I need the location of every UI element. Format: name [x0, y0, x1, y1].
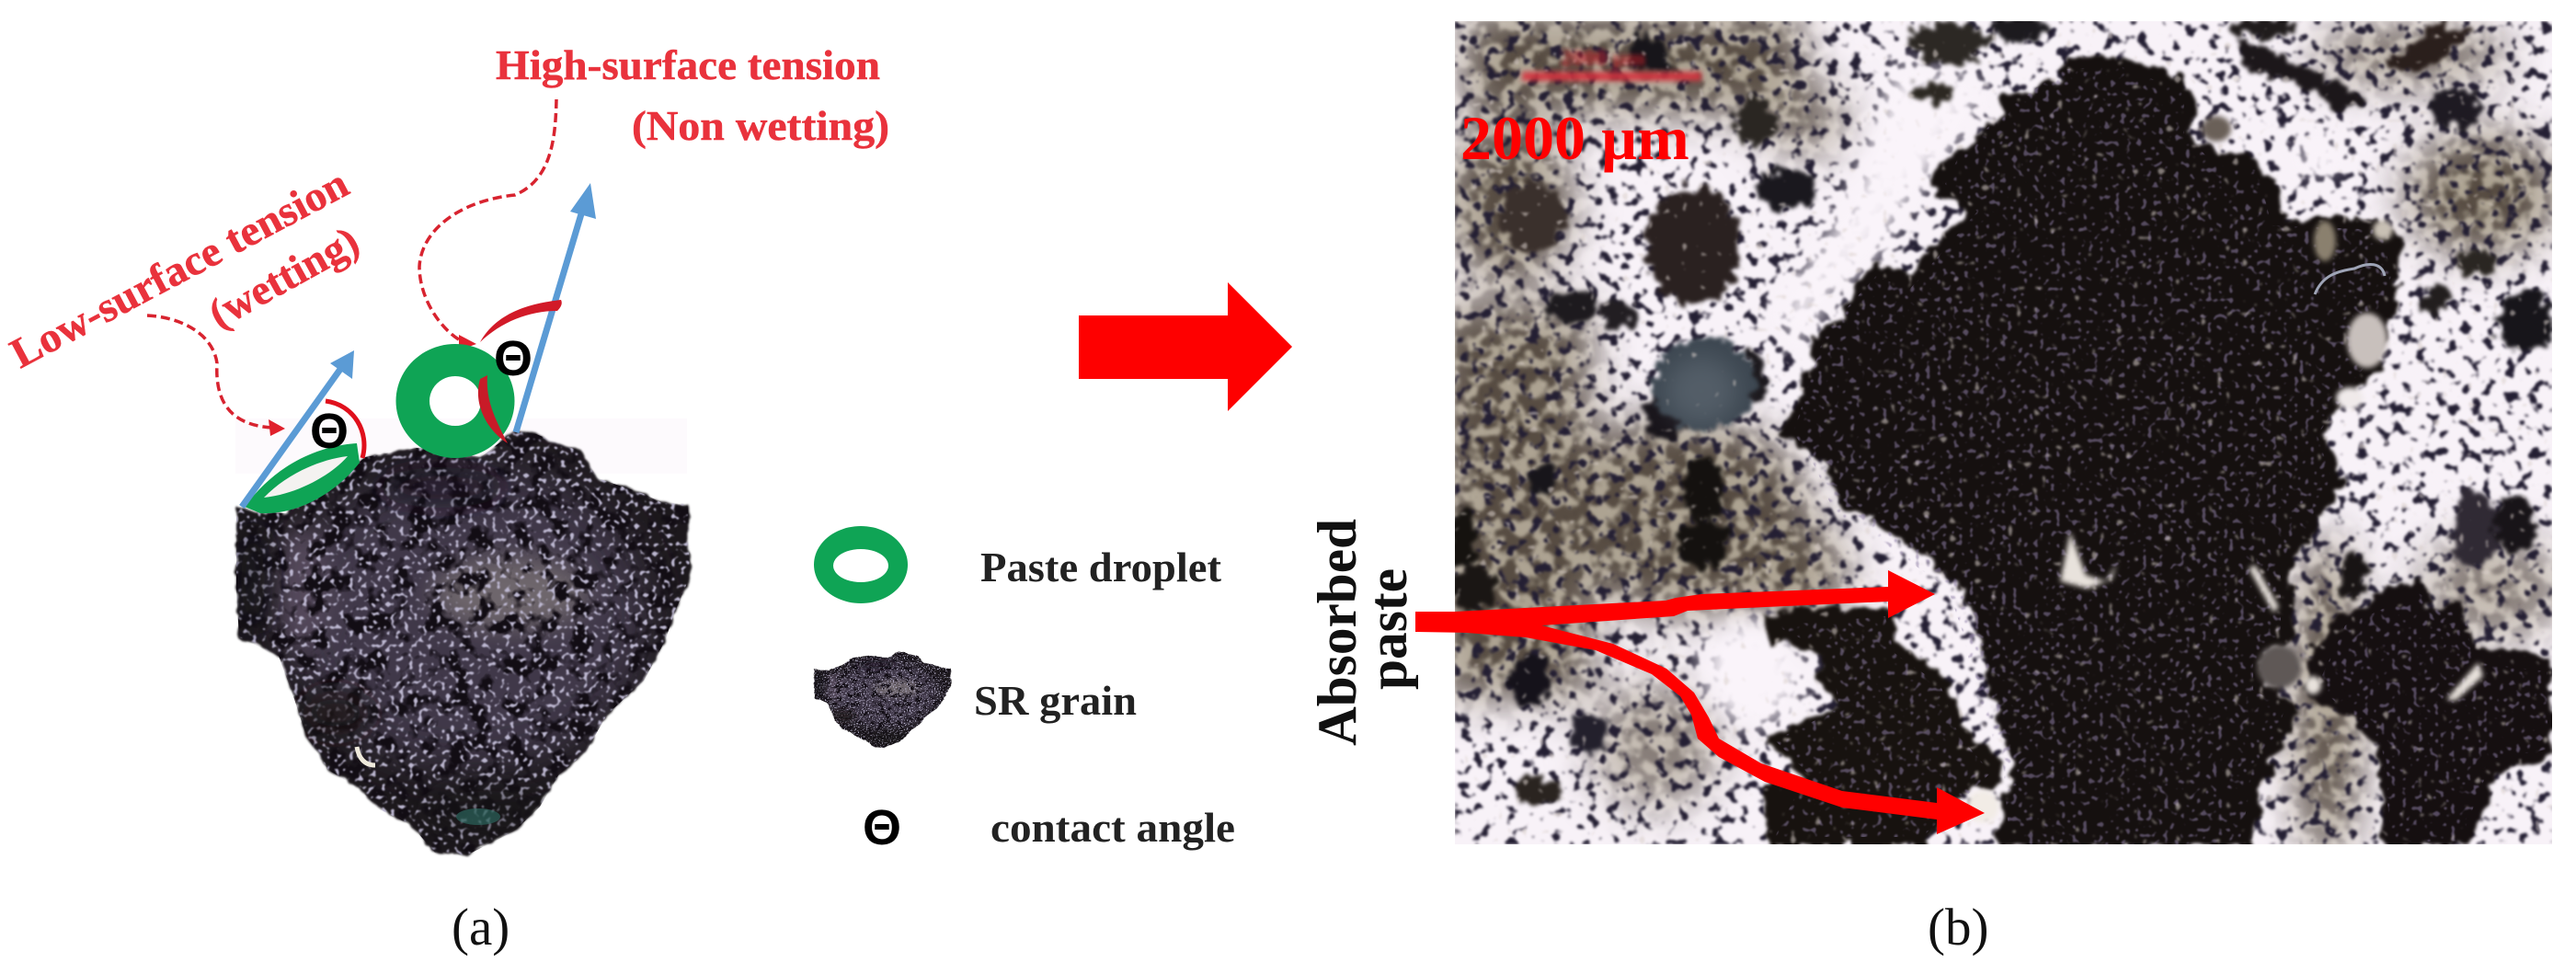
scale label: 2000 µm	[1460, 103, 1689, 173]
scale bar: 2000 µm	[1561, 47, 1645, 71]
low-surface tension label: (wetting)	[200, 217, 367, 338]
panel (b): micrograph	[1448, 15, 2557, 846]
red arrow: absorbed paste lower	[1415, 624, 1985, 834]
contact angle line: wetting	[242, 350, 354, 507]
red arrow: absorbed paste upper	[1415, 570, 1935, 633]
theta symbol: non-wetting: Θ	[494, 331, 532, 386]
absorbed paste label: paste	[1357, 568, 1418, 690]
white clearings	[1701, 64, 2340, 727]
low-surface tension label: Low-surface tension	[3, 159, 356, 377]
wetting droplet	[245, 443, 360, 513]
legend icon: paste droplet	[814, 526, 908, 603]
legend label: contact angle: contact angle	[990, 805, 1235, 851]
caption (a): (a)	[452, 899, 509, 957]
dashed leader: low-surface tension	[147, 315, 285, 436]
blue-grey grain	[1652, 338, 1755, 430]
high-surface tension label: (Non wetting)	[632, 102, 889, 149]
absorbed paste label: Absorbed	[1307, 519, 1368, 746]
lower-right dark grain	[2304, 579, 2552, 846]
inclusions in main grain	[1966, 116, 2483, 823]
SR grain image	[233, 418, 691, 869]
caption (b): (b)	[1928, 899, 1988, 957]
contact angle arc: wetting	[326, 401, 364, 458]
dashed leader: high-surface tension	[419, 99, 556, 350]
main dark grain	[1782, 55, 2402, 846]
panel (a): wetting diagram	[3, 41, 889, 869]
high-surface tension label: High-surface tension	[496, 41, 880, 88]
small dark grains	[1448, 15, 2552, 804]
big red arrow	[1079, 282, 1292, 411]
scale bar	[1522, 47, 1701, 81]
legend	[813, 526, 1235, 855]
absorbed paste label	[1307, 519, 1418, 746]
legend label: SR grain: SR grain	[974, 678, 1137, 724]
contact angle arc: non-wetting	[478, 300, 562, 443]
non-wetting droplet	[396, 344, 515, 458]
legend icon: SR grain	[813, 651, 951, 751]
high-surface tension label	[496, 41, 889, 149]
tan mottled regions	[1455, 21, 2552, 844]
grain surface speckle	[1455, 21, 2557, 846]
legend icon: contact angle: Θ	[863, 800, 901, 855]
theta symbol: wetting: Θ	[310, 404, 349, 459]
lower-left dark grain	[1761, 604, 2007, 846]
contact angle line: non-wetting	[516, 183, 596, 432]
legend label: paste droplet: Paste droplet	[980, 544, 1221, 590]
